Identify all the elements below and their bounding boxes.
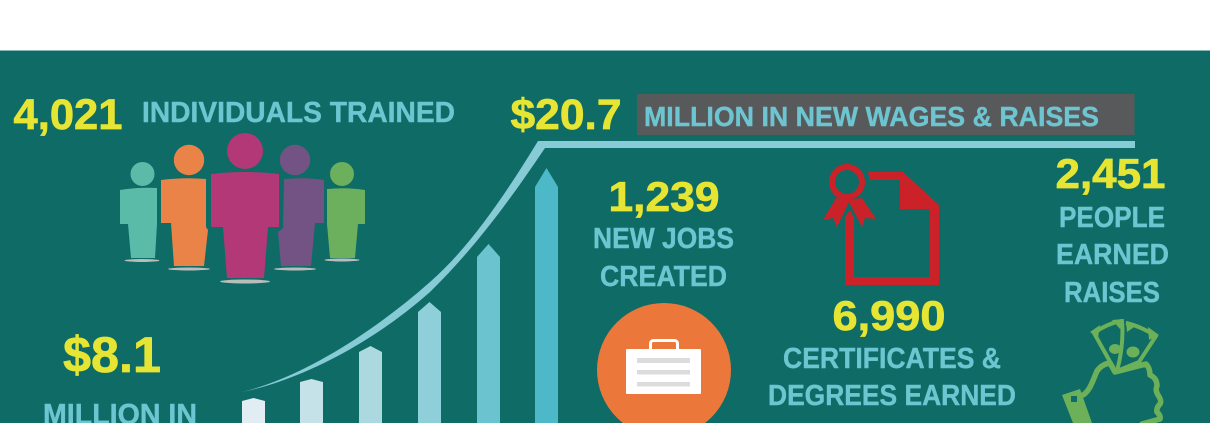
stat: people earned raises: PEOPLE — [1059, 202, 1165, 234]
stat: new jobs created: CREATED — [600, 261, 727, 293]
icon: group of five people — [120, 133, 365, 284]
stat: people earned raises: 2,451 — [1056, 150, 1166, 197]
stat: certificates and degrees earned: DEGREES EARNED — [768, 380, 1016, 412]
stat: new jobs created — [593, 173, 734, 293]
stat: $20.7 million in new wages and raises — [510, 91, 1134, 139]
icon: hand holding money — [1062, 319, 1161, 423]
stat: $20.7 million in new wages and raises: MILLION IN NEW WAGES & RAISES — [644, 101, 1099, 132]
stat: individuals trained: INDIVIDUALS TRAINED — [142, 97, 455, 129]
stat: $8.1 million — [43, 327, 197, 423]
icon: briefcase in orange circle — [597, 303, 731, 423]
stat: new jobs created: 1,239 — [608, 173, 720, 220]
stat: people earned raises: EARNED — [1056, 239, 1169, 271]
stat: certificates and degrees earned: 6,990 — [832, 292, 946, 339]
icon: certificate with ribbon — [823, 164, 939, 285]
stat: individuals trained: 4,021 — [14, 91, 122, 139]
stat: $20.7 million in new wages and raises: $20.7 — [510, 91, 622, 139]
stat: certificates and degrees earned: CERTIFICATES & — [783, 343, 1001, 375]
rising bar arrows chart — [242, 168, 558, 423]
stat: individuals trained — [14, 91, 455, 139]
growth curve line — [242, 141, 1135, 392]
stat: certificates and degrees earned — [768, 292, 1016, 412]
stat: new jobs created: NEW JOBS — [593, 223, 734, 255]
stat: $8.1 million: $8.1 — [63, 327, 161, 383]
stat: people earned raises — [1056, 150, 1169, 309]
stat: people earned raises: RAISES — [1064, 277, 1160, 309]
